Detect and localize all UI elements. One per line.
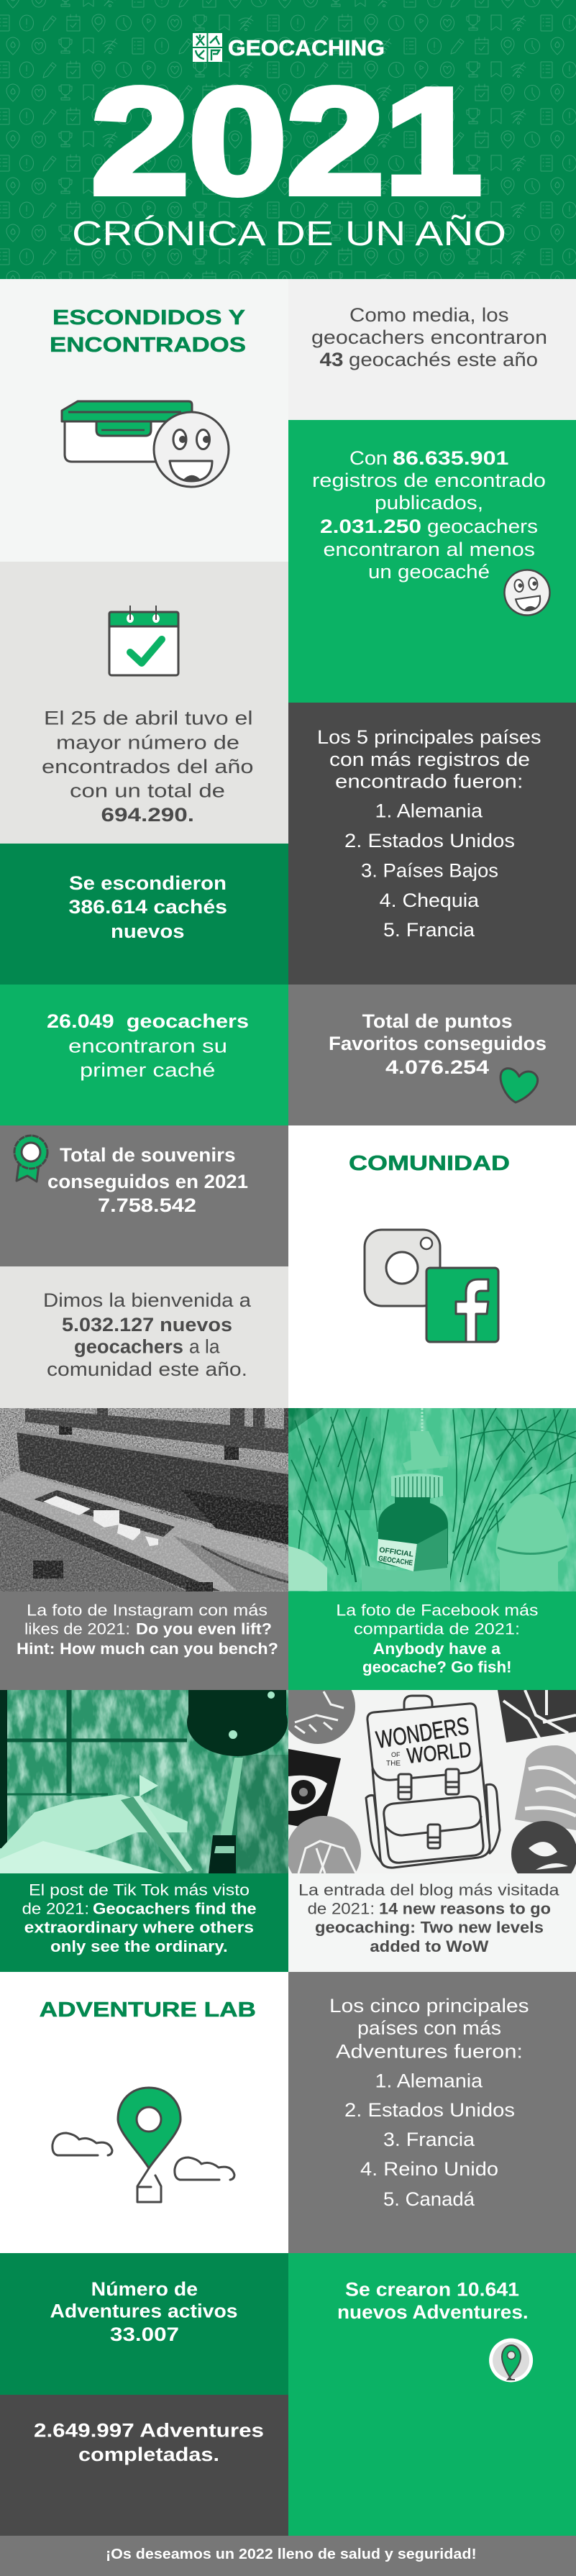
panel: top countries by finds: 1. Alemania (375, 800, 483, 821)
panel: tiktok caption: El post de Tik Tok más visto (29, 1881, 250, 1899)
panel: top countries by finds: con más registros de (329, 749, 530, 770)
panel: active adventures (0, 2253, 288, 2395)
panel: find logs: registros de encontrado (312, 470, 546, 491)
icon: map pin and clouds (52, 2088, 234, 2202)
photo: wonders of the world backpack: OF (391, 1751, 401, 1758)
panel: adventure lab (0, 1972, 288, 2253)
panel: find logs (288, 420, 576, 703)
panel: tiktok caption: extraordinary where others (24, 1919, 254, 1937)
panel: tiktok caption (0, 1873, 288, 1972)
title: 2021: 2021 (91, 58, 482, 226)
icon: small smiley (501, 567, 553, 618)
panel: souvenirs: 7.758.542 (98, 1195, 196, 1216)
photo: wonders of the world backpack: WONDERS (374, 1712, 471, 1754)
panel: active adventures: Adventures activos (50, 2301, 237, 2322)
panel: find logs: 86.635.901 (393, 447, 509, 469)
panel: find logs: un geocaché (368, 561, 490, 583)
photo: bottle geocache (288, 1408, 576, 1591)
photo: bench with cache (0, 1408, 288, 1591)
panel: find logs: encontraron al menos (324, 539, 535, 560)
panel: find logs: geocachers (427, 516, 538, 537)
panel: tiktok caption: Geocachers find the (93, 1900, 257, 1918)
panel: best day: con un total de (70, 780, 225, 801)
footer (0, 2536, 576, 2576)
panel: average finds: 43 (319, 349, 344, 370)
panel: top countries by finds: 3. Países Bajos (361, 860, 498, 882)
icon: heart (500, 1069, 538, 1102)
panel: tiktok caption: de 2021: (22, 1900, 89, 1918)
panel: new adventures (288, 2253, 576, 2536)
panel: souvenirs: Total de souvenirs (60, 1144, 236, 1166)
panel: top adventure countries: países con más (357, 2017, 501, 2039)
panel: new adventures: Se crearon 10.641 (345, 2279, 519, 2301)
panel: average finds (288, 279, 576, 420)
heading: ADVENTURE LAB (40, 1999, 256, 2022)
panel: top countries by finds: encontrado fueron: (335, 771, 524, 793)
panel: new geocachers (0, 1266, 288, 1408)
panel: top adventure countries: 3. Francia (383, 2129, 475, 2150)
panel: first cache: primer caché (80, 1059, 215, 1081)
panel: tiktok caption: only see the ordinary. (50, 1937, 228, 1955)
panel: find logs: 2.031.250 (320, 516, 421, 537)
panel: best day: encontrados del año (42, 756, 253, 777)
panel: find logs: publicados, (375, 492, 483, 513)
heading: COMUNIDAD (349, 1152, 510, 1175)
panel: new caches: 386.614 cachés (69, 896, 227, 918)
icon: cache box and smiley (62, 401, 229, 487)
header banner (0, 0, 576, 288)
photo: wonders of the world backpack (288, 1690, 576, 1873)
panel: best day: El 25 de abril tuvo el (44, 708, 253, 729)
heading (50, 306, 246, 357)
panel: favorite points: 4.076.254 (385, 1056, 489, 1078)
panel: favorite points: Favoritos conseguidos (329, 1033, 547, 1054)
panel: top adventure countries: 4. Reino Unido (360, 2158, 498, 2180)
panel: blog caption (288, 1873, 576, 1972)
panel: top adventure countries: 5. Canadá (383, 2188, 475, 2210)
panel: new caches: Se escondieron (69, 872, 227, 894)
panel: top countries by finds: 2. Estados Unidos (344, 830, 515, 851)
photo: wonders of the world backpack: THE (386, 1760, 401, 1768)
heading: ESCONDIDOS Y (52, 306, 245, 329)
panel: facebook caption (288, 1591, 576, 1690)
icon: adventure badge (489, 2339, 533, 2382)
panel: souvenirs (0, 1125, 288, 1266)
panel: top countries by finds (288, 703, 576, 985)
panel: top countries by finds: 4. Chequia (380, 890, 480, 911)
panel: new caches (0, 844, 288, 985)
icon: calendar check (109, 606, 178, 675)
panel: new geocachers: comunidad este año. (47, 1358, 247, 1380)
panel: blog caption: La entrada del blog más visitada (298, 1881, 559, 1899)
panel: instagram caption (0, 1591, 288, 1690)
panel: top adventure countries: 2. Estados Unidos (344, 2099, 515, 2121)
panel: new geocachers: geocachers (74, 1336, 183, 1358)
panel: new geocachers: 5.032.127 nuevos (62, 1314, 232, 1335)
panel: completed adventures: completadas. (78, 2444, 219, 2465)
panel: blog caption: 14 new reasons to go (379, 1900, 551, 1918)
subtitle: CRÓNICA DE UN AÑO (72, 214, 506, 253)
panel: new adventures: nuevos Adventures. (337, 2301, 529, 2323)
icon: instagram and facebook (365, 1230, 498, 1342)
panel: facebook caption: compartida de 2021: (354, 1620, 520, 1638)
panel: facebook caption: La foto de Facebook más (336, 1602, 538, 1620)
panel: blog caption: de 2021: (308, 1900, 375, 1918)
panel: first cache: 26.049 geocachers (47, 1010, 249, 1032)
panel: top adventure countries (288, 1972, 576, 2253)
panel: best day (0, 562, 288, 844)
icon: geocaching logo (193, 33, 222, 62)
panel: first cache: encontraron su (68, 1036, 227, 1057)
panel: instagram caption: Do you even lift? (136, 1620, 272, 1638)
panel: completed adventures: 2.649.997 Adventures (34, 2420, 264, 2442)
panel: comunidad (288, 1125, 576, 1408)
panel: average finds: geocachers encontraron (311, 326, 547, 348)
panel: top countries by finds: Los 5 principales países (317, 726, 541, 748)
panel: facebook caption: Anybody have a (372, 1640, 500, 1658)
panel: instagram caption: Hint: How much can you bench? (17, 1640, 278, 1658)
panel: escondidos y encontrados (0, 279, 288, 562)
panel: blog caption: added to WoW (370, 1937, 489, 1955)
panel: instagram caption: likes de 2021: (24, 1620, 130, 1638)
panel: facebook caption: geocache? Go fish! (362, 1658, 512, 1676)
panel: top adventure countries: Los cinco principales (329, 1995, 529, 2017)
photo: tiktok video frame (0, 1689, 288, 1873)
panel: new caches: nuevos (111, 921, 184, 942)
panel: favorite points (288, 985, 576, 1125)
panel: best day: 694.290. (101, 804, 194, 826)
panel: best day: mayor número de (56, 732, 239, 754)
footer: ¡Os deseamos un 2022 lleno de salud y seguridad! (106, 2547, 477, 2562)
logo wordmark: GEOCACHING (228, 35, 385, 60)
panel: favorite points: Total de puntos (362, 1010, 513, 1032)
photo: bottle geocache: GEOCACHE (378, 1555, 413, 1568)
panel: blog caption: geocaching: Two new levels (315, 1919, 544, 1937)
panel: souvenirs: conseguidos en 2021 (47, 1171, 248, 1192)
panel: first cache (0, 985, 288, 1125)
photo: wonders of the world backpack: WORLD (406, 1738, 472, 1768)
photo: bottle geocache: OFFICIAL (379, 1546, 414, 1559)
panel: new geocachers: Dimos la bienvenida a (43, 1289, 252, 1311)
panel: active adventures: 33.007 (110, 2324, 179, 2345)
panel: average finds: Como media, los (349, 304, 509, 326)
panel: find logs: Con (349, 447, 388, 469)
panel: average finds: geocachés este año (349, 349, 538, 370)
panel: instagram caption: La foto de Instagram con más (27, 1602, 268, 1620)
panel: top adventure countries: 1. Alemania (375, 2070, 483, 2092)
panel: top adventure countries: Adventures fueron: (336, 2041, 523, 2063)
panel: new geocachers: a la (189, 1336, 220, 1358)
panel: top countries by finds: 5. Francia (383, 919, 475, 941)
heading: ENCONTRADOS (50, 334, 246, 357)
panel: completed adventures (0, 2395, 288, 2536)
panel: active adventures: Número de (91, 2278, 198, 2300)
icon: rosette (14, 1136, 47, 1182)
